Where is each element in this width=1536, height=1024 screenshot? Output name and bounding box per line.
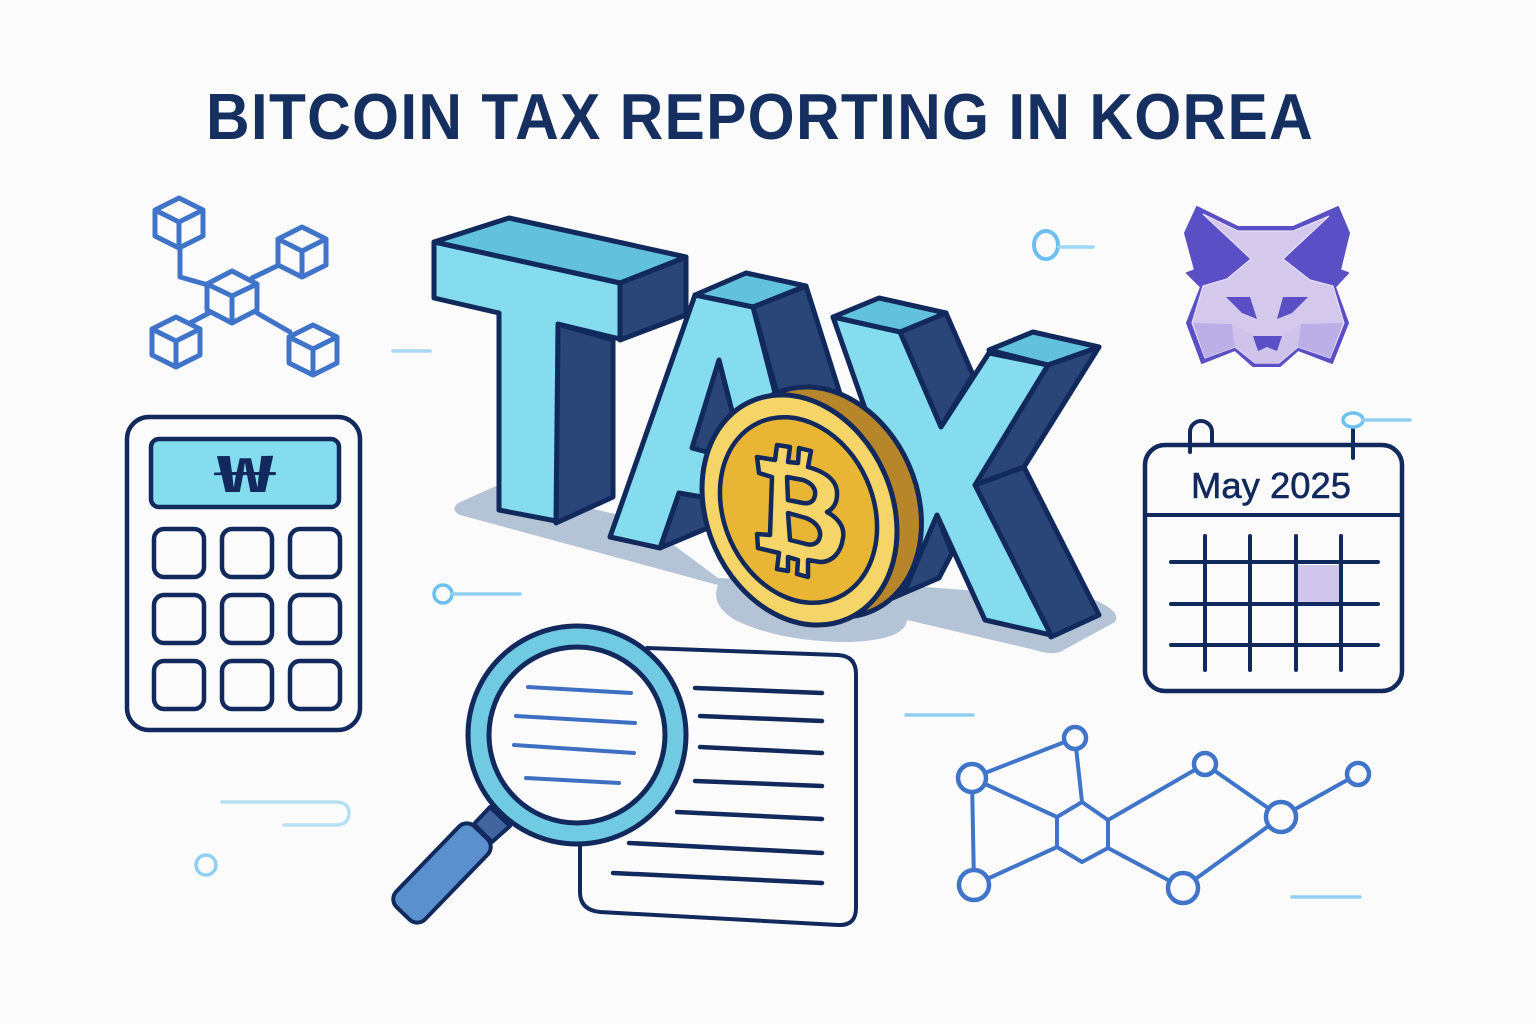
icon: calendar [1145,413,1410,691]
icon: blockchain cubes [152,198,337,375]
calendar heading: May 2025 [1191,465,1351,506]
title: BITCOIN TAX REPORTING IN KOREA [206,81,1313,153]
document with text lines [580,648,856,925]
decorative accents [196,231,1360,897]
calculator screen [151,439,339,507]
icon: calculator with won sign [127,417,360,730]
magnified lines [514,687,635,783]
calendar ring accent [1343,413,1410,427]
icon: magnifying glass [389,626,686,927]
calculator buttons [154,529,340,709]
3D letter X [833,298,1099,637]
highlighted day [1298,565,1339,602]
network diagram [958,727,1369,903]
ground shadow under TAX [454,486,1116,653]
icon: fox logo [1185,207,1349,366]
icon: bitcoin symbol [757,445,843,577]
3D letter T [434,218,686,523]
bitcoin coin [667,356,957,656]
3D letter A [610,273,842,548]
won sign: ₩ [212,435,277,507]
